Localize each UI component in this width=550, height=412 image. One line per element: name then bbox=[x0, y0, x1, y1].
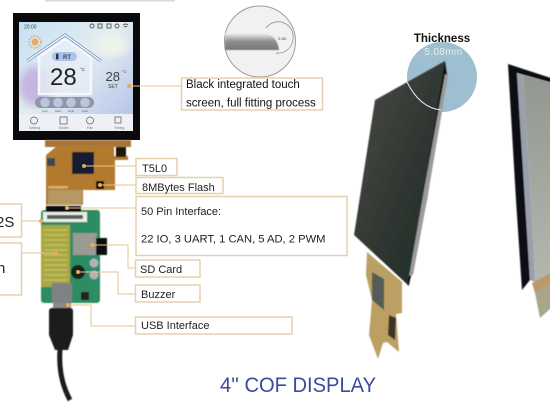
pin rows bbox=[44, 230, 67, 280]
label: buzzer: Buzzer bbox=[141, 289, 176, 301]
PCB bbox=[41, 210, 100, 303]
silver edge bbox=[409, 74, 448, 276]
radius arc bbox=[266, 22, 293, 53]
cable bbox=[60, 350, 70, 400]
USB plug bbox=[49, 308, 73, 350]
magnifier circle bbox=[224, 6, 296, 77]
set temperature: °C bbox=[122, 69, 127, 74]
ribbon connector bbox=[46, 206, 81, 212]
silver strip bbox=[517, 73, 535, 282]
set temperature bbox=[106, 69, 127, 90]
connector slot bbox=[47, 215, 83, 219]
icon: sun bbox=[29, 36, 41, 48]
RT pill: RT bbox=[63, 55, 71, 61]
label: fitting process: screen, full fitting process bbox=[186, 98, 316, 110]
fan buttons: Auto bbox=[82, 109, 89, 113]
white connector bbox=[43, 212, 87, 222]
value: 5.08mm: 5.08mm bbox=[425, 47, 462, 58]
top shade bbox=[45, 0, 175, 2]
USB plug metal bbox=[53, 303, 71, 310]
fan buttons bbox=[35, 97, 94, 113]
set temperature: SET bbox=[108, 84, 118, 90]
2.5D label: 2.5D bbox=[278, 36, 287, 41]
fan buttons: Med bbox=[55, 109, 61, 113]
label boxes bbox=[0, 78, 347, 334]
status icons bbox=[90, 24, 128, 28]
USB socket bbox=[52, 283, 72, 303]
thickness callout bbox=[407, 42, 477, 112]
screen wallpaper bbox=[19, 22, 133, 114]
unit: °C bbox=[80, 67, 86, 72]
ribbon top bbox=[45, 140, 131, 147]
set temperature: 28 bbox=[106, 69, 120, 84]
leader lines bbox=[21, 86, 181, 326]
label: touch screen: Black integrated touch bbox=[186, 79, 300, 91]
room temperature: 28 bbox=[50, 64, 77, 91]
circuit parts bbox=[388, 315, 396, 340]
buzzer bbox=[71, 265, 85, 279]
T5L0 chip bbox=[72, 152, 94, 174]
gold pin block bbox=[41, 225, 70, 287]
black frame bbox=[508, 64, 550, 290]
status bar: 20:00 bbox=[24, 24, 37, 30]
driver chip bbox=[372, 272, 384, 310]
flex cable bbox=[366, 252, 402, 359]
heading: thickness: Thickness bbox=[414, 33, 470, 45]
label: 50 pin: 50 Pin Interface: bbox=[141, 206, 221, 218]
tape bbox=[532, 268, 550, 293]
photo: controller flex board bbox=[45, 140, 131, 205]
callout: 2.5D glass bbox=[224, 6, 296, 77]
orange flex PCB bbox=[46, 146, 128, 205]
bottom menu: Model bbox=[59, 126, 69, 130]
capacitors bbox=[90, 258, 98, 268]
blue part bbox=[47, 158, 55, 166]
bottom menu: Fan bbox=[87, 126, 93, 130]
label: pin detail: 22 IO, 3 UART, 1 CAN, 5 AD, 2 PWM bbox=[141, 234, 325, 246]
label: T5L0: T5L0 bbox=[142, 163, 167, 175]
bottom menu: Timing bbox=[114, 126, 124, 130]
fan buttons: Low bbox=[42, 109, 48, 113]
label: USB: USB Interface bbox=[141, 320, 209, 332]
fan buttons: High bbox=[68, 109, 75, 113]
photo: green interface board bbox=[41, 206, 107, 400]
title: 4'' COF DISPLAY bbox=[220, 374, 376, 397]
leader dots bbox=[39, 84, 131, 307]
IC bbox=[81, 292, 89, 300]
gold pads bbox=[48, 186, 68, 188]
touch screen display bbox=[13, 13, 140, 140]
grey back bbox=[523, 75, 550, 282]
panel edge bbox=[407, 61, 447, 286]
photo: display side view bbox=[354, 61, 448, 359]
bottom menu bbox=[19, 114, 133, 131]
bottom menu: Setting bbox=[29, 126, 40, 130]
flex bbox=[535, 278, 550, 318]
SD card socket bbox=[73, 233, 97, 255]
icon: house bbox=[27, 35, 101, 94]
flex tail bbox=[48, 190, 82, 205]
flash chip bbox=[96, 181, 104, 189]
label: SD card: SD Card bbox=[140, 264, 182, 276]
photo: display back view bbox=[508, 64, 550, 318]
small component bbox=[116, 147, 126, 157]
SD tab bbox=[96, 238, 107, 255]
magnifier arc bbox=[407, 82, 441, 110]
label: flash: 8MBytes Flash bbox=[142, 182, 215, 194]
glass edge bbox=[225, 33, 279, 50]
dark panel bbox=[354, 61, 445, 286]
black bezel bbox=[13, 13, 140, 140]
blue circle bbox=[407, 42, 477, 112]
